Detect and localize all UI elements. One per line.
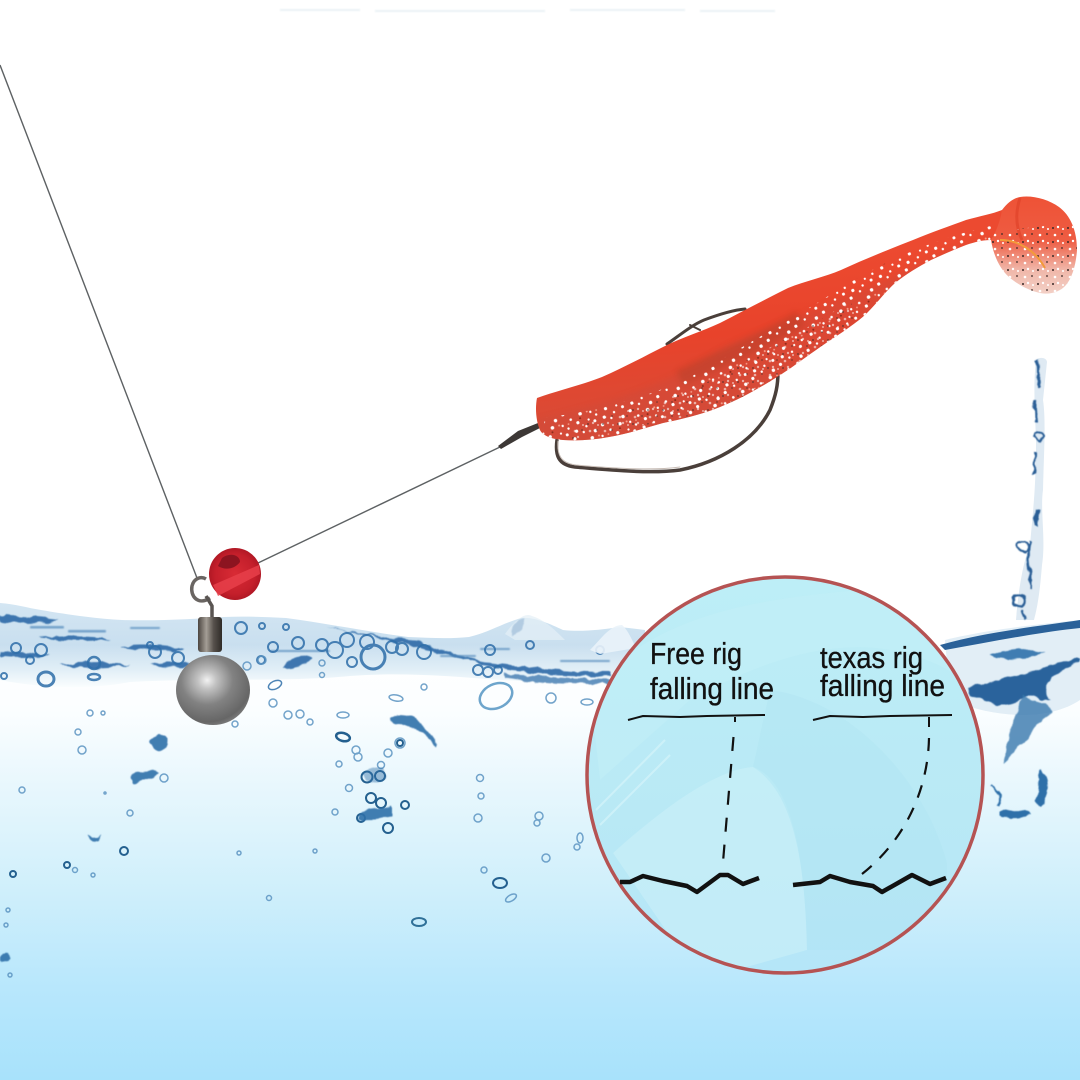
lure body xyxy=(536,210,1010,440)
right water surface and plume xyxy=(940,620,1080,820)
texas rig diagram xyxy=(793,715,952,892)
round sinker xyxy=(176,655,250,725)
large blue bubbles xyxy=(0,715,435,962)
swivel eye xyxy=(192,578,210,601)
bubbles in surface foam xyxy=(1,622,604,686)
inset background xyxy=(587,577,983,973)
swivel connector to lure xyxy=(498,423,540,449)
dark surface streaks xyxy=(0,614,620,685)
water body xyxy=(0,660,1080,1080)
splash column xyxy=(1013,358,1047,620)
lure tail xyxy=(991,196,1077,294)
hook xyxy=(556,309,778,472)
inset border xyxy=(587,577,983,973)
red bead xyxy=(205,544,265,604)
faint top edge artifact xyxy=(280,9,775,12)
inset circle: falling line comparison xyxy=(587,577,990,980)
leader line xyxy=(258,447,500,563)
texas rig label xyxy=(820,640,945,703)
free rig diagram xyxy=(620,715,765,892)
texas rig label: falling line xyxy=(820,668,945,703)
soft plastic lure xyxy=(536,196,1080,450)
faint lure shapes in inset xyxy=(596,740,807,967)
free rig label: falling line xyxy=(650,671,774,706)
free rig label: Free rig xyxy=(650,636,742,671)
fishing line main xyxy=(0,65,197,578)
texas rig label: texas rig xyxy=(820,640,923,675)
free rig label xyxy=(650,636,774,706)
bubbles underwater xyxy=(4,656,593,977)
water surface band xyxy=(0,603,1080,715)
lure shading and glitter xyxy=(537,222,1010,450)
swivel barrel xyxy=(198,617,222,652)
